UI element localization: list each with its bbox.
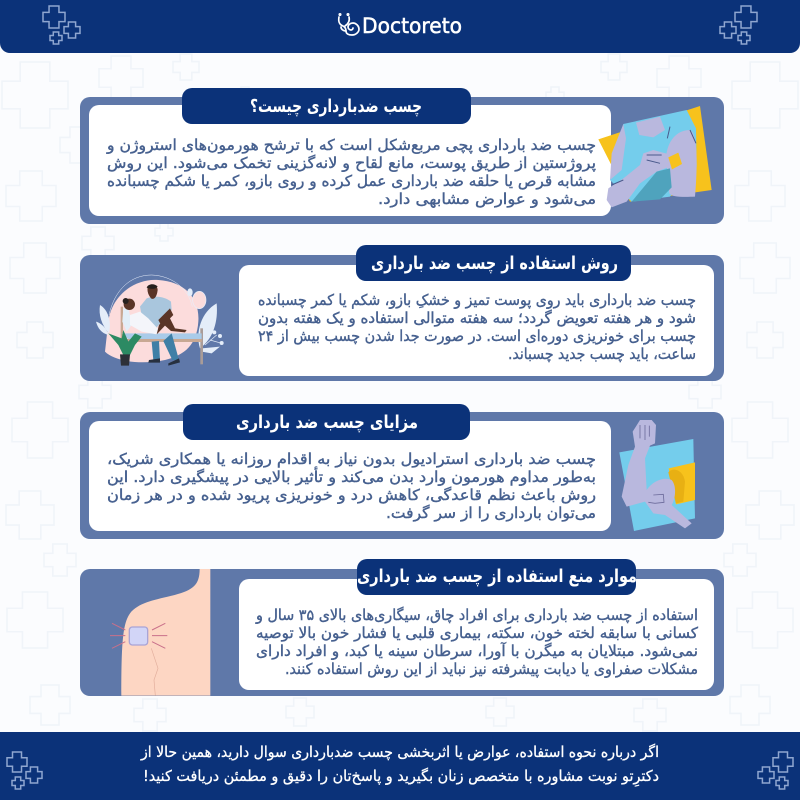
body text: چسب ضد بارداری پچی مربع‌شکل است که با ترشح هورمون‌های استروژن و [106, 136, 596, 155]
body text: چسب ضد بارداری باید روی پوست تمیز و خشکِ بازو، شکم یا کمر چسبانده [258, 291, 696, 310]
body text: مشکلات صفراوی یا دیابت پیشرفته نیز نباید از این روش استفاده کنند. [285, 660, 698, 679]
heading: مزایای چسب ضد بارداری [236, 412, 418, 433]
heading pill [356, 245, 631, 281]
icon: footer crosses right [758, 752, 793, 789]
body text: استفاده از چسب ضد بارداری برای افراد چاق، سیگاری‌های بالای ۳۵ سال و [255, 606, 698, 624]
heading: روش استفاده از چسب ضد بارداری [371, 253, 618, 274]
icon: arm with patch [619, 420, 695, 531]
panel: what is the patch [80, 88, 724, 224]
icon: header crosses right [720, 6, 757, 44]
body text [106, 136, 596, 208]
illustration: shoulder with patch [110, 569, 210, 696]
panel: contraindications [80, 559, 724, 696]
body text [258, 291, 696, 363]
text card [89, 105, 611, 216]
heading pill [182, 88, 471, 124]
body text: ساعت، باید چسب جدید چسباند. [508, 345, 696, 363]
icon: couple on bed with plant [96, 275, 224, 366]
panel: how to use [80, 245, 724, 381]
icon: stethoscope logo [339, 14, 359, 35]
text card [89, 421, 611, 531]
heading pill [183, 404, 470, 440]
logo wordmark: Doctoreto [362, 14, 462, 38]
body text: مشابه قرص یا حلقه ضد بارداری عمل کرده و روی بازو، کمر یا شکم چسبانده [107, 172, 596, 190]
body text: چسب برای خونریزی دوره‌ای است. در صورت جدا شدن چسب بیش از ۲۴ [258, 327, 696, 345]
panel: benefits [80, 404, 724, 539]
heading pill [357, 559, 636, 595]
body text: روش باعث نظم قاعدگی، کاهش درد و خونریزی پریود شده و در هر زمان [107, 486, 596, 505]
footer text [140, 743, 659, 788]
icon: header crosses left [43, 6, 80, 44]
footer bar [0, 732, 800, 800]
body text: پروژستین از طریق پوست، مانع لقاح و لانه‌گزینی تخمک می‌شود. این روش [107, 154, 596, 173]
body text: می‌شود و عوارض مشابهی دارد. [378, 190, 596, 208]
body text [107, 450, 596, 522]
body text [255, 606, 699, 679]
body text: به‌طور مداوم هورمون وارد بدن می‌کند و تأثیر بالایی در پیشگیری دارد. این [107, 466, 596, 487]
footer text: دکترِتو نوبت مشاوره با متخصص زنان بگیرید و پاسخ‌تان را دقیق و مطمئن دریافت کنید! [143, 767, 659, 788]
body text: نمی‌شود. مبتلایان به میگرن با آورا، سرطان سینه یا کبد، و افراد دارای [256, 642, 698, 660]
body text: می‌توان بارداری را از سر گرفت. [386, 504, 596, 522]
text card [239, 579, 714, 690]
footer text: اگر درباره نحوه استفاده، عوارض یا اثربخشی چسب ضدبارداری سوال دارید، همین حالا از [140, 743, 659, 761]
header bar [0, 0, 800, 53]
icon: footer crosses left [7, 752, 42, 789]
heading: موارد منع استفاده از چسب ضد بارداری [357, 566, 637, 587]
heading: چسب ضدبارداری چیست؟ [250, 96, 422, 117]
body text: شود و هر هفته تعویض گردد؛ سه هفته متوالی استفاده و یک هفته بدون [258, 309, 696, 327]
body text: کسانی با سابقه لخته خون، سکته، بیماری قلبی یا فشار خون بالا توصیه [256, 624, 699, 642]
body text: چسب ضد بارداری استرادیول بدون نیاز به اقدام روزانه یا همکاری شریک، [107, 450, 596, 468]
text card [239, 265, 714, 376]
icon: woman applying patch on arm [598, 106, 712, 207]
